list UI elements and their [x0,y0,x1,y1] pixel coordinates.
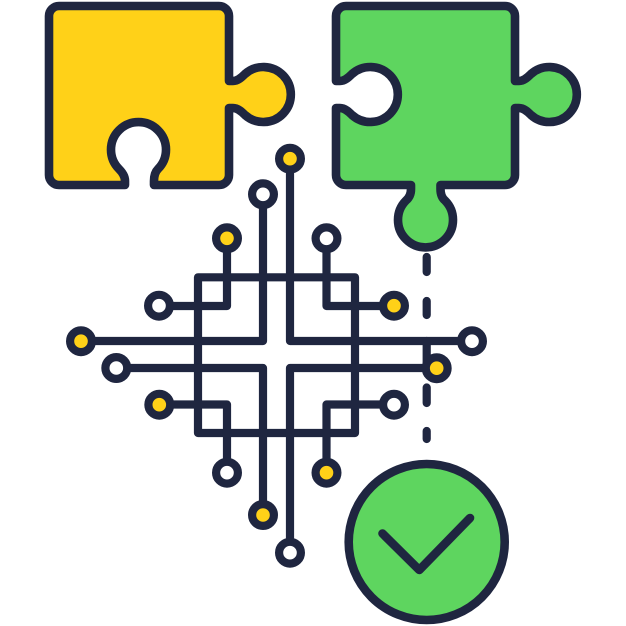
node: bottom yellow [252,504,274,526]
node: bottom white [279,542,301,564]
green puzzle piece [336,6,577,247]
circuit board traces [81,158,472,553]
circuit nodes [70,148,483,564]
dashed connector line [423,257,431,439]
node: lower right white [383,394,405,416]
node: bottom left white [216,462,238,484]
green check mark badge [349,464,505,620]
node: far right white [461,330,483,352]
node: right yellow [383,295,405,317]
node: lower left yellow [148,394,170,416]
node: upper right white [316,227,337,249]
node: top white [252,183,274,205]
node: right middle yellow [426,357,448,379]
node: far left yellow [70,330,92,352]
node: top yellow [279,148,301,170]
node: left middle white [105,357,127,379]
node: upper left yellow [216,227,238,249]
node: bottom right yellow [316,462,337,484]
node: left white [148,295,170,317]
yellow puzzle piece [49,6,291,185]
